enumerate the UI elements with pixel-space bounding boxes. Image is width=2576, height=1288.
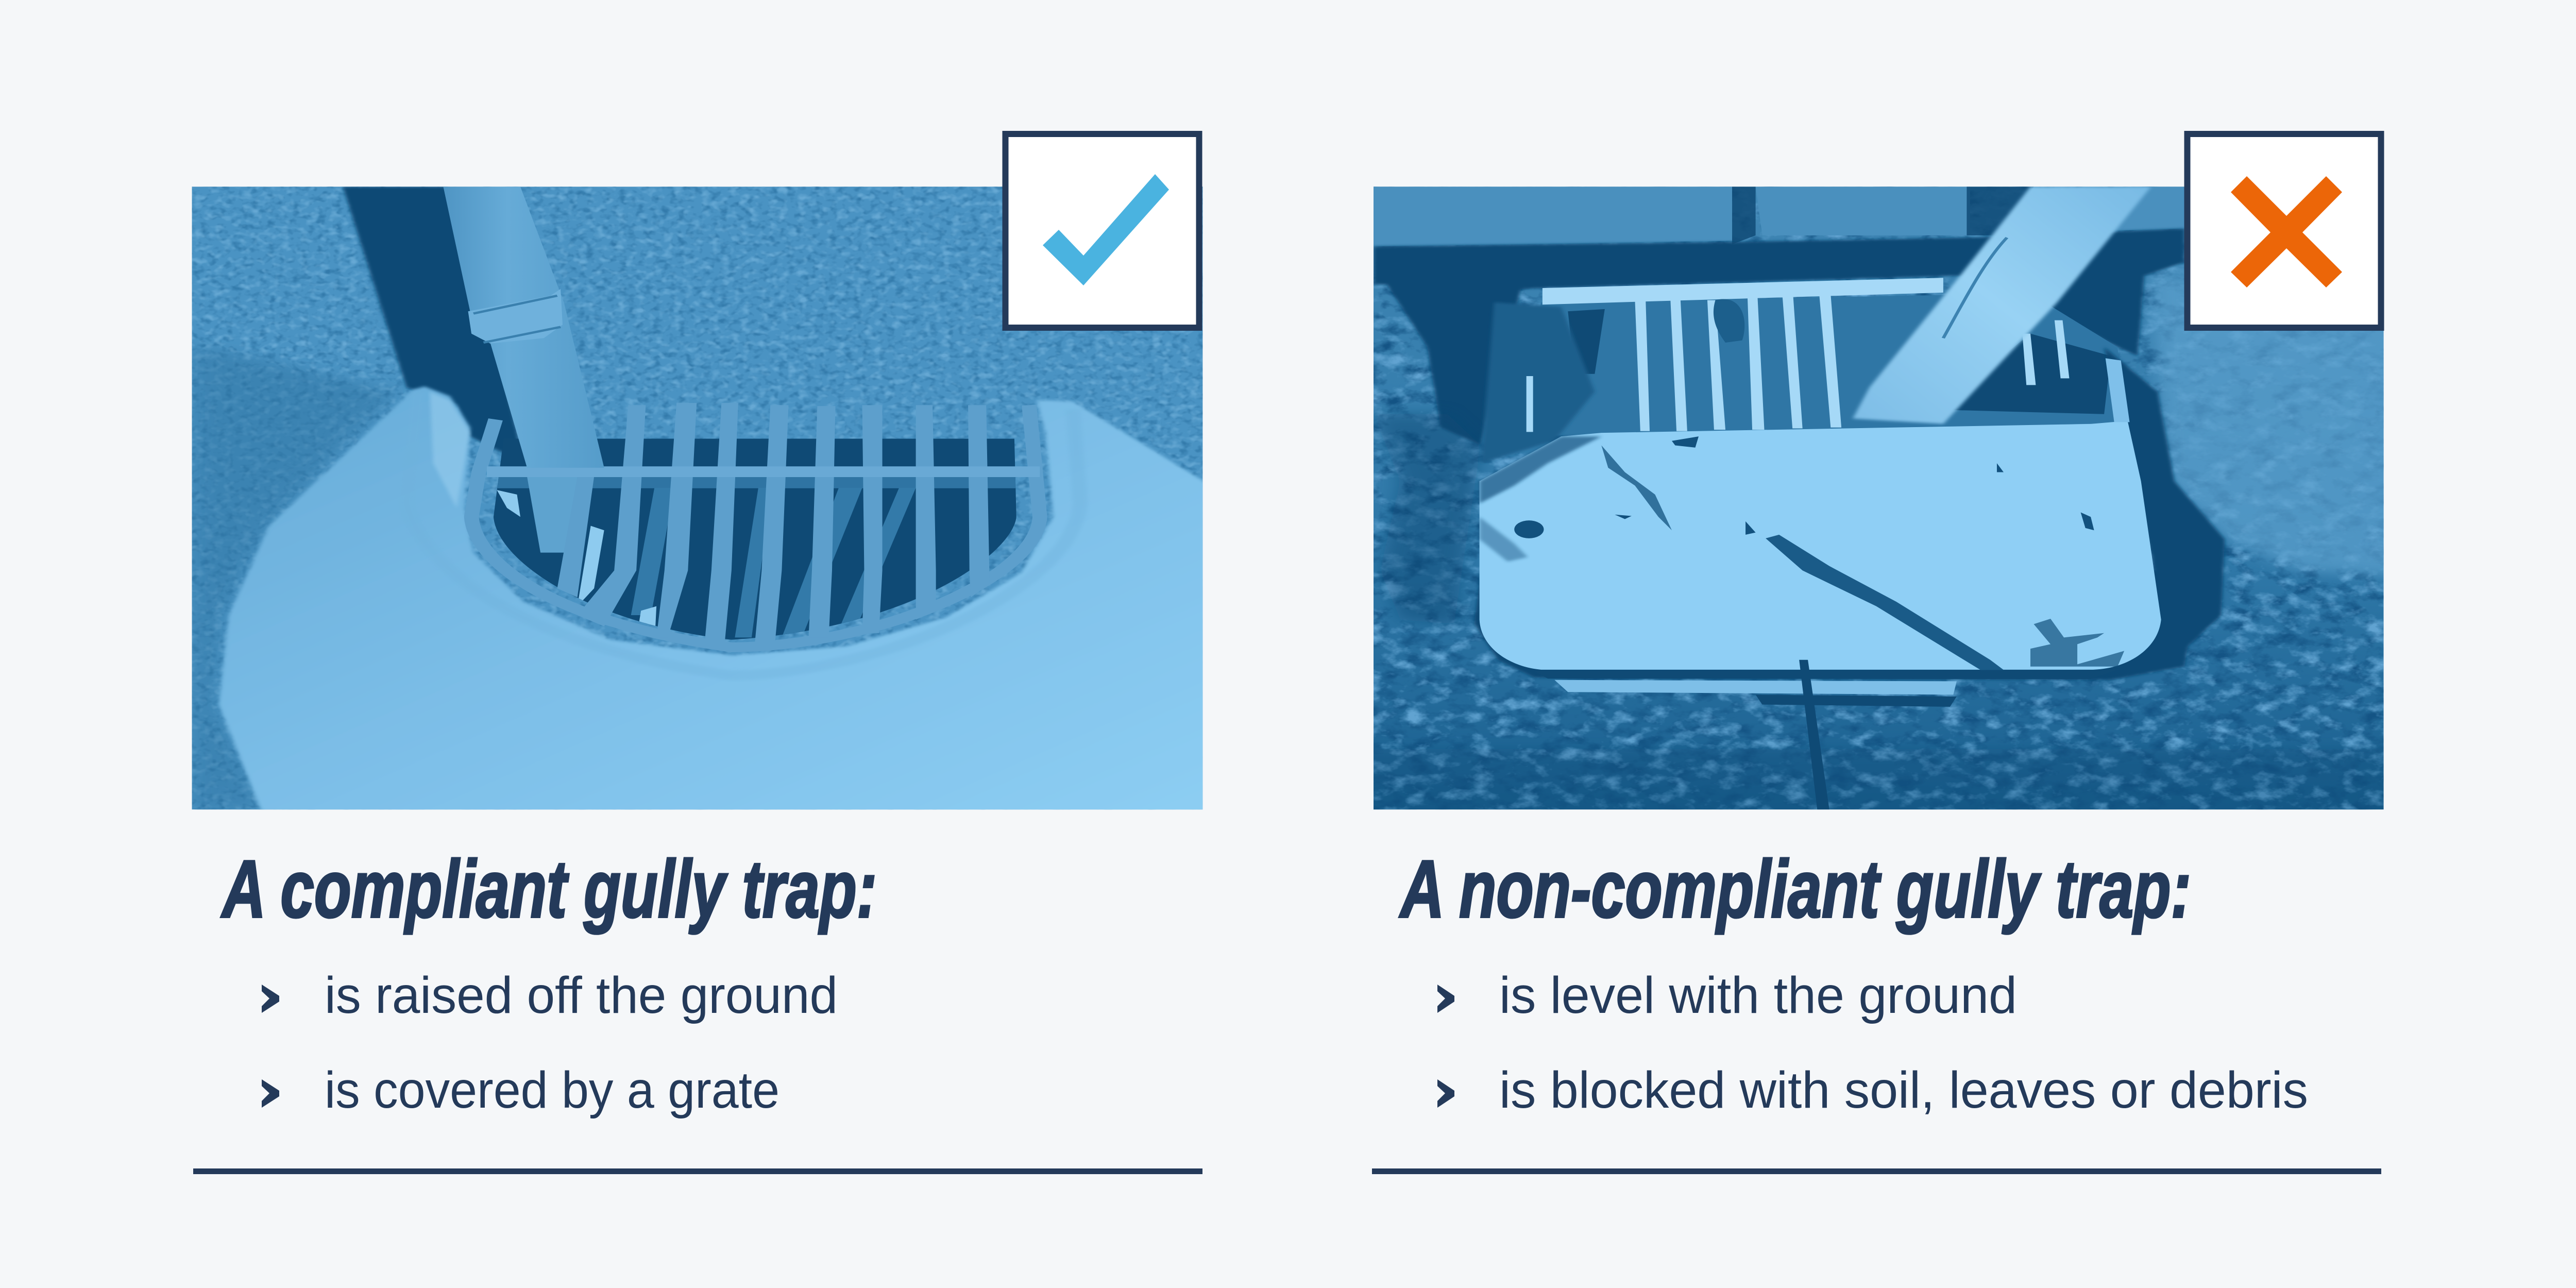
grate bars	[487, 403, 1040, 642]
concrete mound	[217, 385, 1202, 810]
photo: blocked gully trap level with ground	[1333, 187, 2433, 839]
stick	[1766, 535, 2017, 680]
heading: non-compliant: A non-compliant gully trap:	[1399, 844, 2191, 935]
bullet: raised off the ground: is raised off the ground	[325, 967, 838, 1024]
bullet list: non-compliant	[1437, 967, 2308, 1119]
bullet: covered by a grate: is covered by a grate	[325, 1061, 779, 1119]
grate bars	[1527, 278, 2069, 432]
wall blocks	[1374, 187, 2184, 247]
infographic: gully trap comparison	[192, 131, 2384, 1174]
heading: compliant: A compliant gully trap:	[221, 844, 877, 935]
grate slots	[483, 432, 1033, 647]
bullet: blocked with soil, leaves or debris: is blocked with soil, leaves or debris	[1499, 1061, 2308, 1119]
lower lip and crack	[1554, 680, 1957, 694]
bullet list: compliant	[262, 967, 838, 1119]
pipe shadow	[343, 187, 524, 463]
photo: raised gully trap with grate	[192, 187, 1248, 839]
downpipe	[1853, 187, 2151, 424]
panel: compliant gully trap	[192, 134, 1248, 1174]
status box: cross	[2188, 134, 2381, 328]
debris on lid	[1480, 436, 2124, 667]
icon: check mark	[1043, 174, 1169, 285]
downpipe	[443, 187, 604, 468]
grate frame	[471, 405, 1040, 647]
icon: cross mark	[2231, 176, 2342, 287]
rule	[193, 1168, 1202, 1174]
panel: non-compliant gully trap	[1333, 134, 2433, 1174]
dark gap behind trap	[1374, 229, 2184, 445]
concrete rim	[406, 392, 1080, 675]
bullet: level with the ground: is level with the ground	[1499, 967, 2017, 1024]
lid	[1480, 421, 2161, 670]
dark rim around lid	[1474, 347, 2225, 680]
rule	[1372, 1168, 2381, 1174]
trap opening	[1521, 294, 2124, 436]
status box: tick	[1006, 134, 1199, 328]
